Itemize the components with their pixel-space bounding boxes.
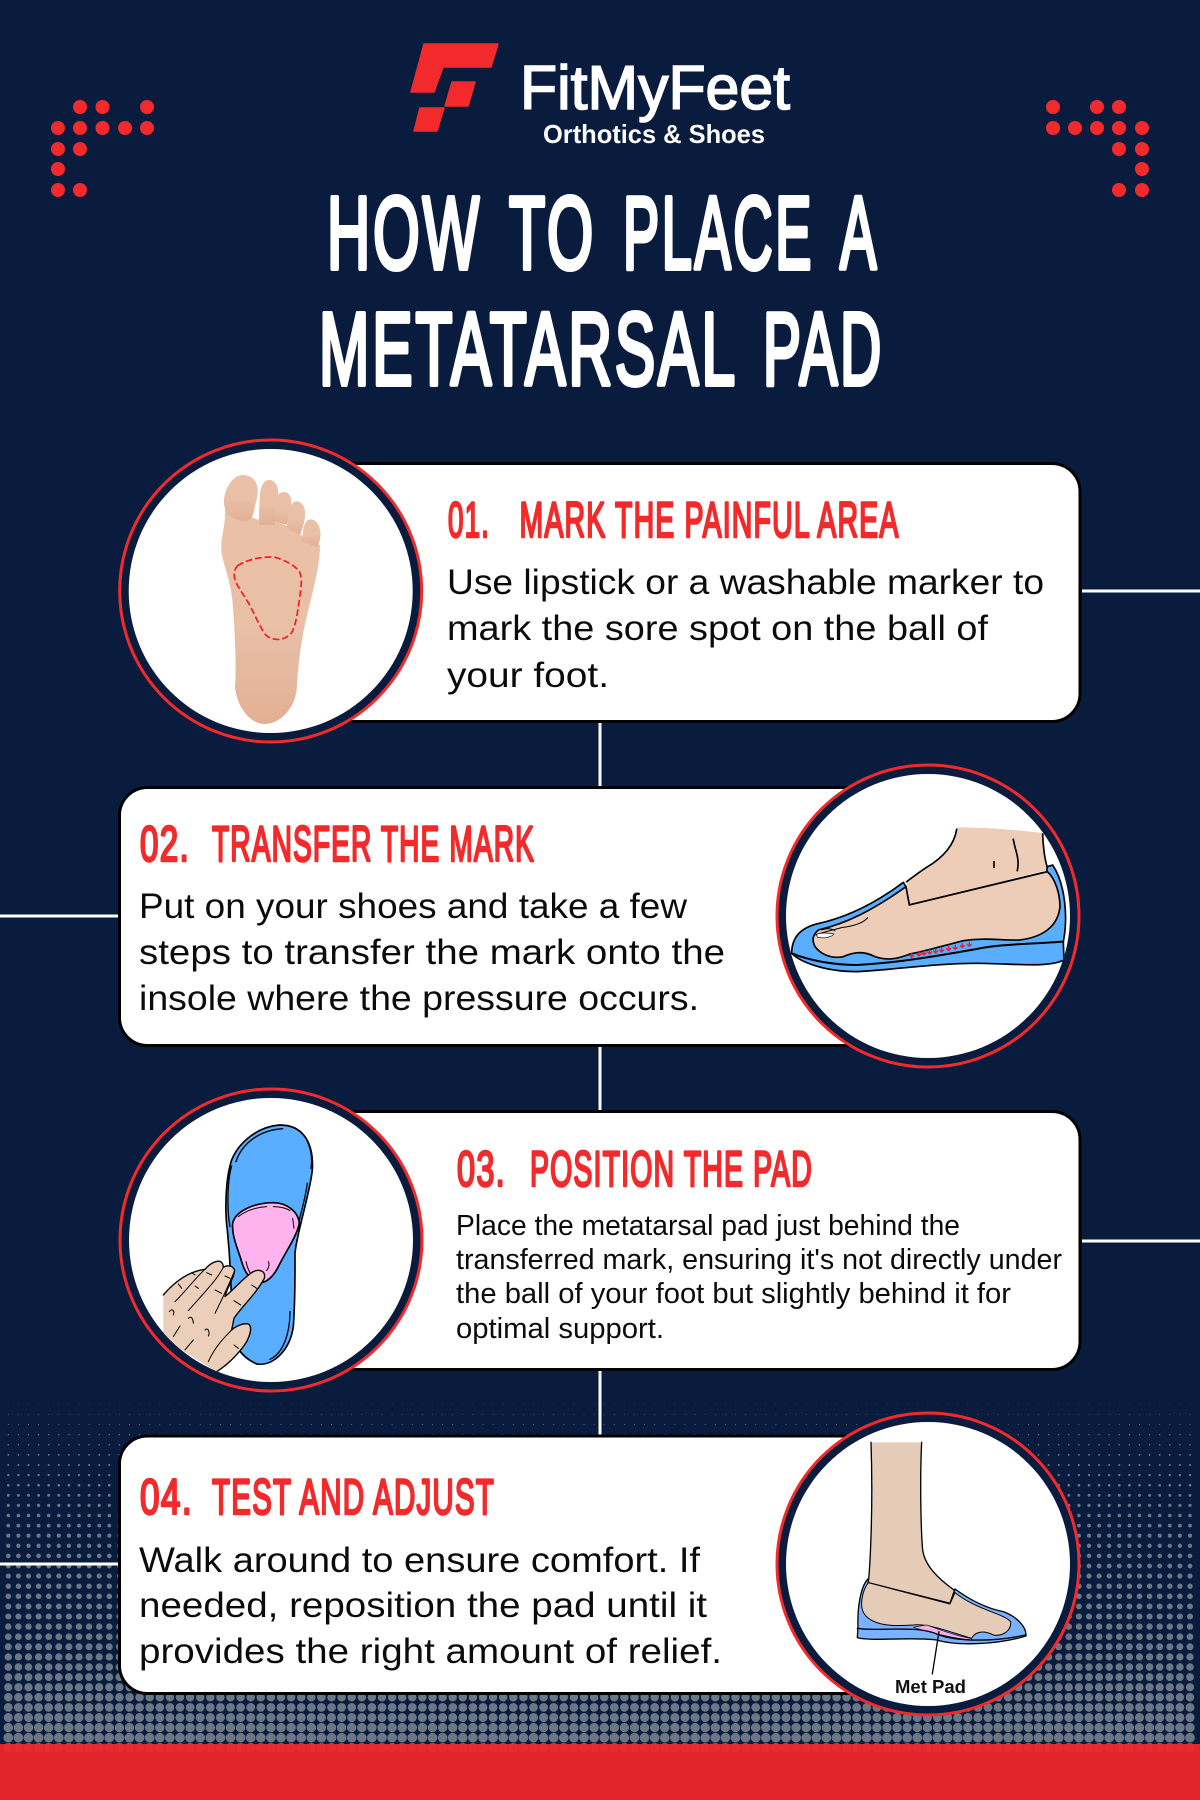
heading: step 3: 03. (457, 1141, 506, 1197)
title: TO (509, 176, 596, 290)
title: PAD (763, 292, 884, 406)
body text: step 4 (139, 1541, 722, 1671)
title: HOW (327, 176, 482, 290)
icon: foot in shoe with pressure arrows (792, 827, 1066, 972)
badge ring 1 (120, 440, 422, 742)
heading: step 1: 01. (448, 492, 490, 548)
body text: step 3: optimal support. (456, 1313, 664, 1345)
heading: step 3: POSITION THE PAD (530, 1141, 813, 1197)
body text: step 3: Place the metatarsal pad just behind the (456, 1210, 960, 1242)
body text: step 1 (447, 563, 1044, 695)
body text: step 4: Walk around to ensure comfort. If (139, 1541, 700, 1580)
body text: step 4: needed, reposition the pad until it (139, 1586, 707, 1625)
body text: step 1: Use lipstick or a washable marker to (447, 563, 1044, 602)
title: METATARSAL (319, 292, 738, 406)
heading: step 4: TEST AND ADJUST (212, 1469, 495, 1525)
heading: step 1 (448, 492, 900, 548)
icon: shoe with met pad (857, 1442, 1026, 1697)
card 1 (280, 464, 1080, 722)
heading: step 1: MARK THE PAINFUL AREA (520, 492, 900, 548)
badge ring 2 (777, 765, 1079, 1067)
body text: step 4: provides the right amount of relief. (139, 1632, 722, 1671)
decorative dots: right (1046, 100, 1149, 197)
panel: step 2 (120, 765, 1079, 1067)
body text: step 1: mark the sore spot on the ball of (447, 609, 988, 648)
logo mark: red F (411, 44, 498, 131)
body text: step 1: your foot. (447, 656, 609, 695)
logo (411, 44, 790, 149)
title: PLACE (623, 176, 814, 290)
body text: step 2: steps to transfer the mark onto the (139, 933, 725, 972)
heading: step 2: 02. (140, 816, 190, 872)
body text: step 3 (456, 1210, 1063, 1345)
body text: step 3: transferred mark, ensuring it's not directly under (456, 1244, 1063, 1276)
panel: step 3 (120, 1089, 1080, 1391)
logo tagline: Orthotics & Shoes (543, 119, 765, 149)
heading: step 3 (457, 1141, 813, 1197)
icon: hand placing pad on insole (163, 1125, 312, 1372)
card 4 (120, 1436, 920, 1694)
heading: step 4: 04. (140, 1469, 193, 1525)
panel: step 1 (120, 440, 1080, 742)
card 2 (120, 788, 920, 1046)
label: Met Pad: Met Pad (895, 1677, 966, 1697)
footer band (0, 1744, 1200, 1800)
heading: step 2 (140, 816, 535, 872)
heading: step 4 (140, 1469, 495, 1525)
logo wordmark: FitMyFeet (520, 54, 790, 123)
body text: step 2: insole where the pressure occurs. (139, 979, 699, 1018)
decorative dots: left (51, 100, 154, 197)
icon: foot sole with marked area (221, 475, 321, 724)
badge ring 3 (120, 1089, 422, 1391)
heading: step 2: TRANSFER THE MARK (212, 816, 535, 872)
body text: step 3: the ball of your foot but slightly behind it for (456, 1278, 1012, 1310)
body text: step 2 (139, 887, 725, 1018)
card 3 (280, 1112, 1080, 1370)
panel: step 4 (120, 1413, 1079, 1715)
body text: step 2: Put on your shoes and take a few (139, 887, 688, 926)
title (319, 176, 884, 406)
badge ring 4 (777, 1413, 1079, 1715)
title: A (840, 176, 879, 290)
